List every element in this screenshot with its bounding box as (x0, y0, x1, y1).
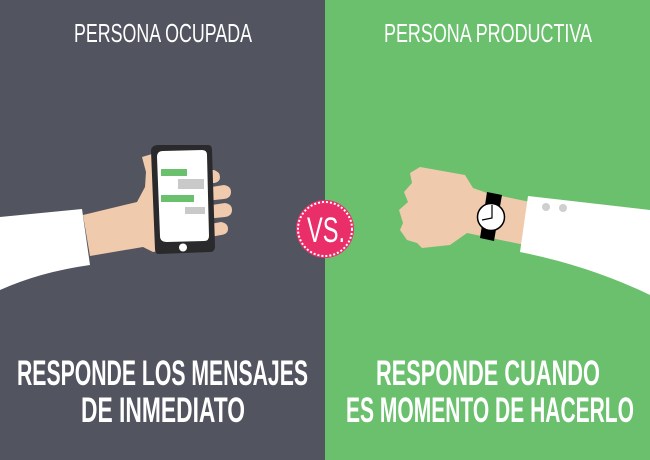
icon: hand with wristwatch (399, 167, 650, 295)
heading: responde los mensajes: DE INMEDIATO (81, 391, 245, 430)
icon: hand holding phone (0, 145, 232, 290)
heading: responde cuando (346, 354, 634, 430)
badge: vs (296, 200, 354, 258)
badge: vs: VS. (307, 211, 345, 250)
panel: persona productiva (325, 0, 650, 460)
fingers (205, 170, 232, 238)
heading: persona ocupada: PERSONA OCUPADA (74, 18, 252, 48)
panel: persona ocupada (0, 0, 325, 460)
heading: responde los mensajes (17, 354, 308, 430)
heading: responde los mensajes: RESPONDE LOS MENSAJES (17, 354, 308, 393)
